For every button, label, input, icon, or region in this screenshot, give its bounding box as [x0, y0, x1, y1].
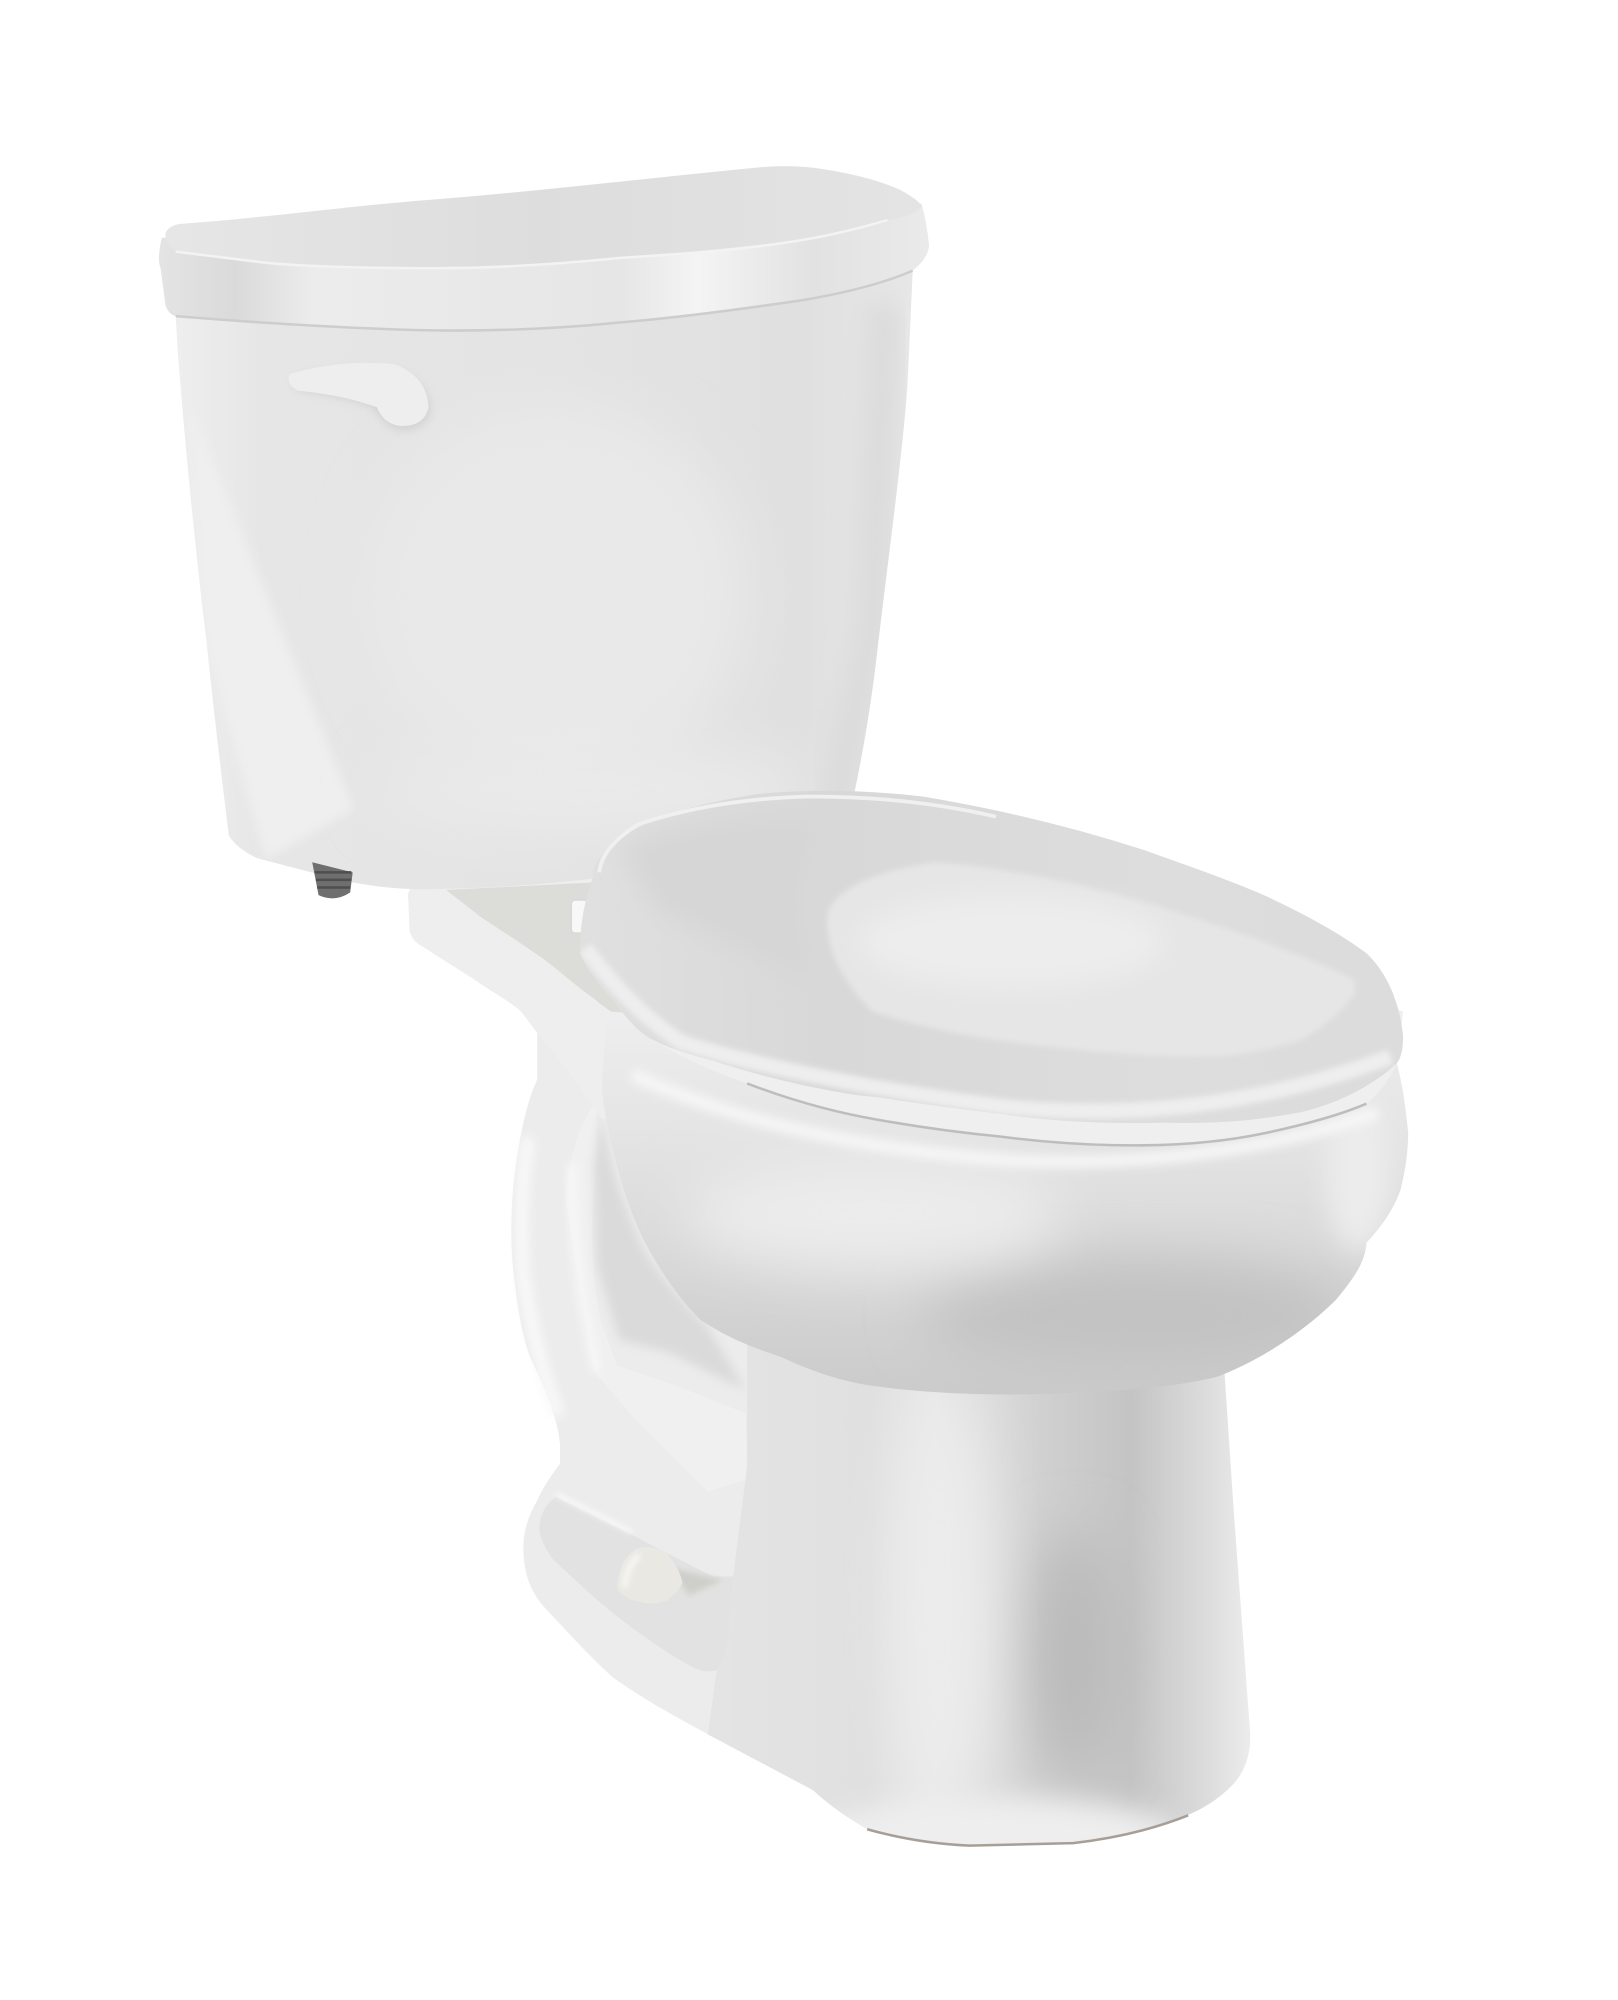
rim underside line: [176, 271, 913, 331]
bowl body: [602, 1011, 1408, 1394]
cover lower edge light: [585, 948, 1390, 1111]
bowl cast shadow on trapway: [594, 1113, 746, 1391]
toilet seat and cover: [571, 791, 1403, 1145]
cover top rim highlight: [599, 796, 996, 872]
handle shadow: [293, 370, 430, 430]
cover raised facet: [827, 862, 1355, 1057]
tank lower light: [379, 746, 809, 834]
product photo: two-piece toilet: [159, 166, 1408, 1847]
handle body: [289, 363, 429, 426]
pedestal shading: [850, 1496, 1171, 1844]
tank left crease light: [254, 587, 346, 848]
water inlet nut: [312, 862, 353, 898]
trapway and foot silhouette: [511, 1011, 885, 1790]
foot recess top glare: [556, 1494, 632, 1532]
thread lines: [315, 872, 351, 887]
bolt cap highlight: [624, 1555, 640, 1588]
toilet bowl and neck: [408, 872, 1408, 1394]
seat ring shadow line: [747, 1083, 1366, 1145]
cover facet highlight: [860, 896, 1163, 987]
flush handle: [289, 363, 430, 430]
bowl upper light: [700, 1172, 1049, 1282]
neck and rim band: [408, 872, 1408, 1182]
pedestal base glow: [850, 1790, 1171, 1844]
foot recess: [539, 1497, 733, 1671]
toilet trapway and foot: [511, 1011, 885, 1790]
base edge shadow: [867, 1815, 1188, 1846]
cover left shade: [664, 858, 671, 872]
tank centre light: [367, 405, 746, 784]
threaded stem: [312, 862, 353, 898]
bowl right light: [1330, 1137, 1388, 1250]
tank shading: [254, 320, 892, 848]
cover outer: [580, 791, 1403, 1123]
cover shading: [582, 858, 1392, 1119]
tank: [159, 166, 929, 898]
seat ring: [580, 885, 1403, 1145]
pedestal body: [708, 1340, 1250, 1844]
tank body: [176, 272, 913, 889]
tank lid top: [165, 166, 922, 268]
trapway inner shade: [566, 1100, 747, 1492]
seat hinge: [571, 900, 588, 933]
lid lower edge: [176, 220, 887, 268]
pedestal light band: [959, 1496, 997, 1720]
trapway outer highlight: [522, 1138, 559, 1416]
floor bolt cap: [617, 1547, 683, 1603]
tank rim band: [159, 204, 929, 331]
bowl shading: [632, 1075, 1392, 1372]
neck top surface: [446, 882, 647, 1037]
pedestal front: [708, 1340, 1250, 1868]
bowl lower right shadow: [923, 1258, 1353, 1372]
pedestal central shadow: [1031, 1530, 1117, 1782]
trapway inner highlight: [571, 1163, 597, 1372]
floor bolt cap shadow: [670, 1568, 723, 1595]
bowl upper rim glare: [632, 1075, 1378, 1162]
tank right shadow: [866, 320, 892, 666]
